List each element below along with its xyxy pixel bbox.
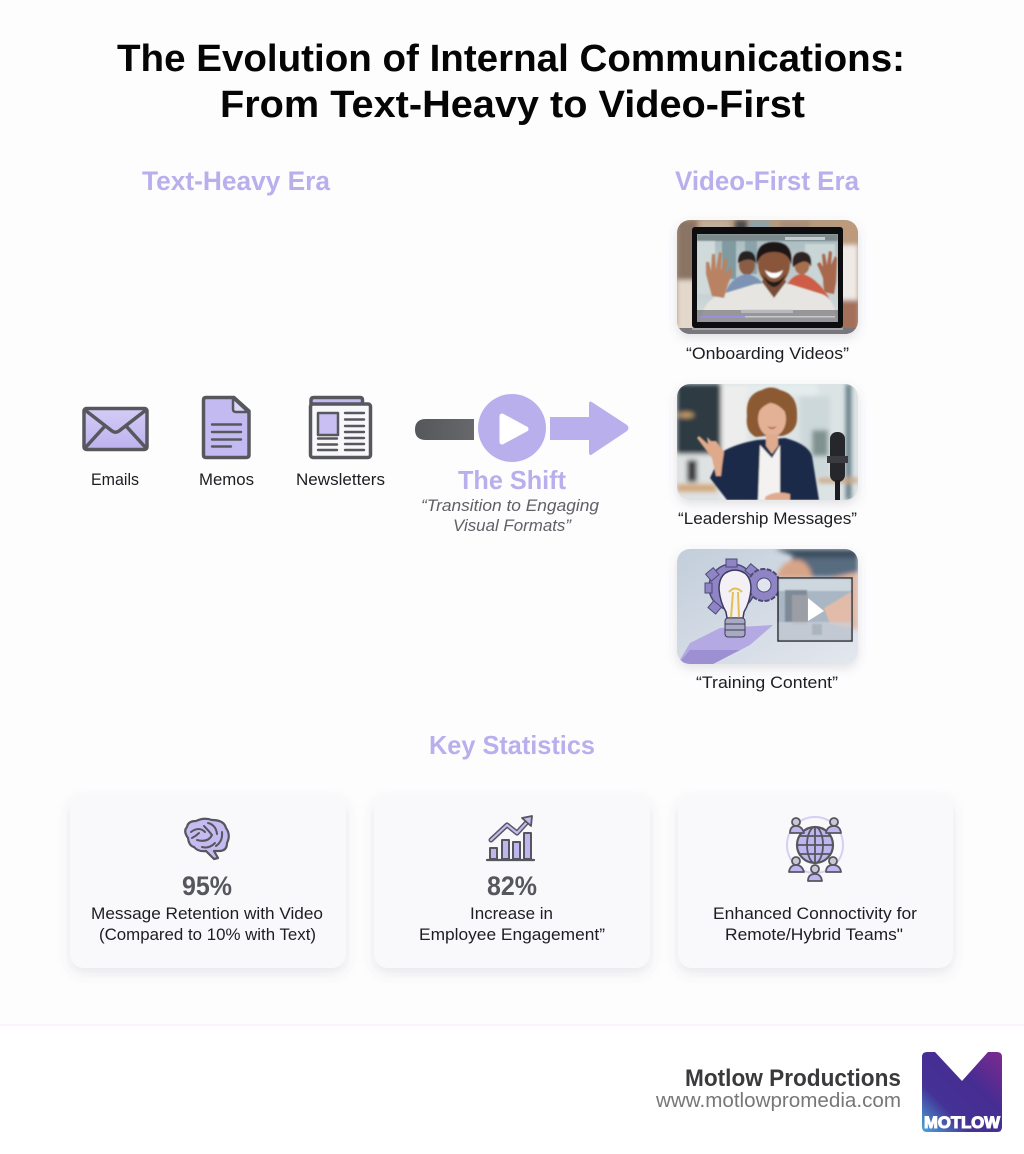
stat description (419, 904, 605, 944)
heading: text-heavy era: Text-Heavy Era (142, 166, 331, 196)
icon: memo document (204, 398, 249, 458)
laptop screen (697, 234, 838, 322)
stat description: Message Retention with Video (91, 904, 323, 923)
waving hand right (817, 251, 837, 294)
caption: the shift (421, 497, 600, 535)
panel: the shift (415, 394, 628, 535)
caption: onboarding videos: “Onboarding Videos” (686, 344, 849, 363)
panel: stat connectivity (678, 795, 953, 968)
stat value: 95%: 95% (182, 871, 232, 901)
panel: footer (0, 1024, 1024, 1154)
label: newsletters: Newsletters (296, 470, 385, 489)
stat description: Enhanced Connoctivity for (713, 904, 917, 923)
caption: leadership messages: “Leadership Messages” (678, 509, 857, 528)
heading: key statistics: Key Statistics (429, 730, 595, 760)
gear large (705, 559, 758, 614)
icon: newsletter (310, 398, 370, 458)
panel: stat engagement (374, 795, 650, 968)
stat description (713, 904, 917, 944)
panel: text-heavy formats (84, 398, 385, 489)
stat description (91, 904, 323, 944)
panel: onboarding videos (677, 220, 858, 363)
icon: brain (185, 819, 229, 859)
lightbulb (719, 570, 751, 618)
panel: training content (677, 549, 858, 692)
photo: laptop video call (677, 220, 858, 335)
caption: the shift: Visual Formats” (453, 517, 573, 535)
label: memos: Memos (199, 470, 254, 489)
stat description: (Compared to 10% with Text) (99, 925, 316, 944)
panel: stat retention (70, 795, 346, 968)
stat description: Remote/Hybrid Teams" (725, 925, 903, 944)
icon: rising bar chart (487, 816, 534, 860)
microphone (827, 432, 848, 500)
raised hand (697, 436, 724, 476)
left colleague (739, 255, 755, 275)
heading: video-first era: Video-First Era (675, 166, 860, 196)
purple platform (678, 625, 773, 664)
stat value: 82%: 82% (487, 871, 537, 901)
logo (922, 1052, 1002, 1132)
icon: globe with people (787, 817, 843, 881)
timeline bar (415, 419, 474, 440)
main presenter (700, 242, 838, 322)
heading: the shift: The Shift (458, 465, 566, 495)
logo: MOTLOW (924, 1114, 1000, 1132)
title (117, 38, 905, 126)
video tile (778, 578, 852, 641)
right colleague (794, 260, 810, 275)
caption: the shift: “Transition to Engaging (421, 497, 600, 515)
photo: lightbulb gears and video tile (677, 549, 858, 664)
caption: training content: “Training Content” (696, 673, 838, 692)
website: www.motlowpromedia.com (655, 1090, 901, 1112)
label: emails: Emails (91, 470, 139, 489)
stat description: Increase in (470, 904, 553, 923)
panel: leadership messages (677, 384, 858, 528)
title: From Text-Heavy to Video-First (220, 84, 805, 126)
woman figure (697, 388, 819, 500)
arrow: shift to video (550, 402, 628, 455)
video play icon (808, 598, 824, 621)
stat description: Employee Engagement” (419, 925, 605, 944)
icon: email envelope (84, 408, 147, 450)
gear small (748, 569, 780, 601)
waving hand left (706, 252, 733, 298)
photo: executive speaking to microphone (677, 384, 858, 500)
title: The Evolution of Internal Communications: (117, 38, 905, 80)
icon: play button (478, 394, 546, 462)
brand name: Motlow Productions (685, 1065, 901, 1092)
laptop frame (692, 227, 843, 328)
